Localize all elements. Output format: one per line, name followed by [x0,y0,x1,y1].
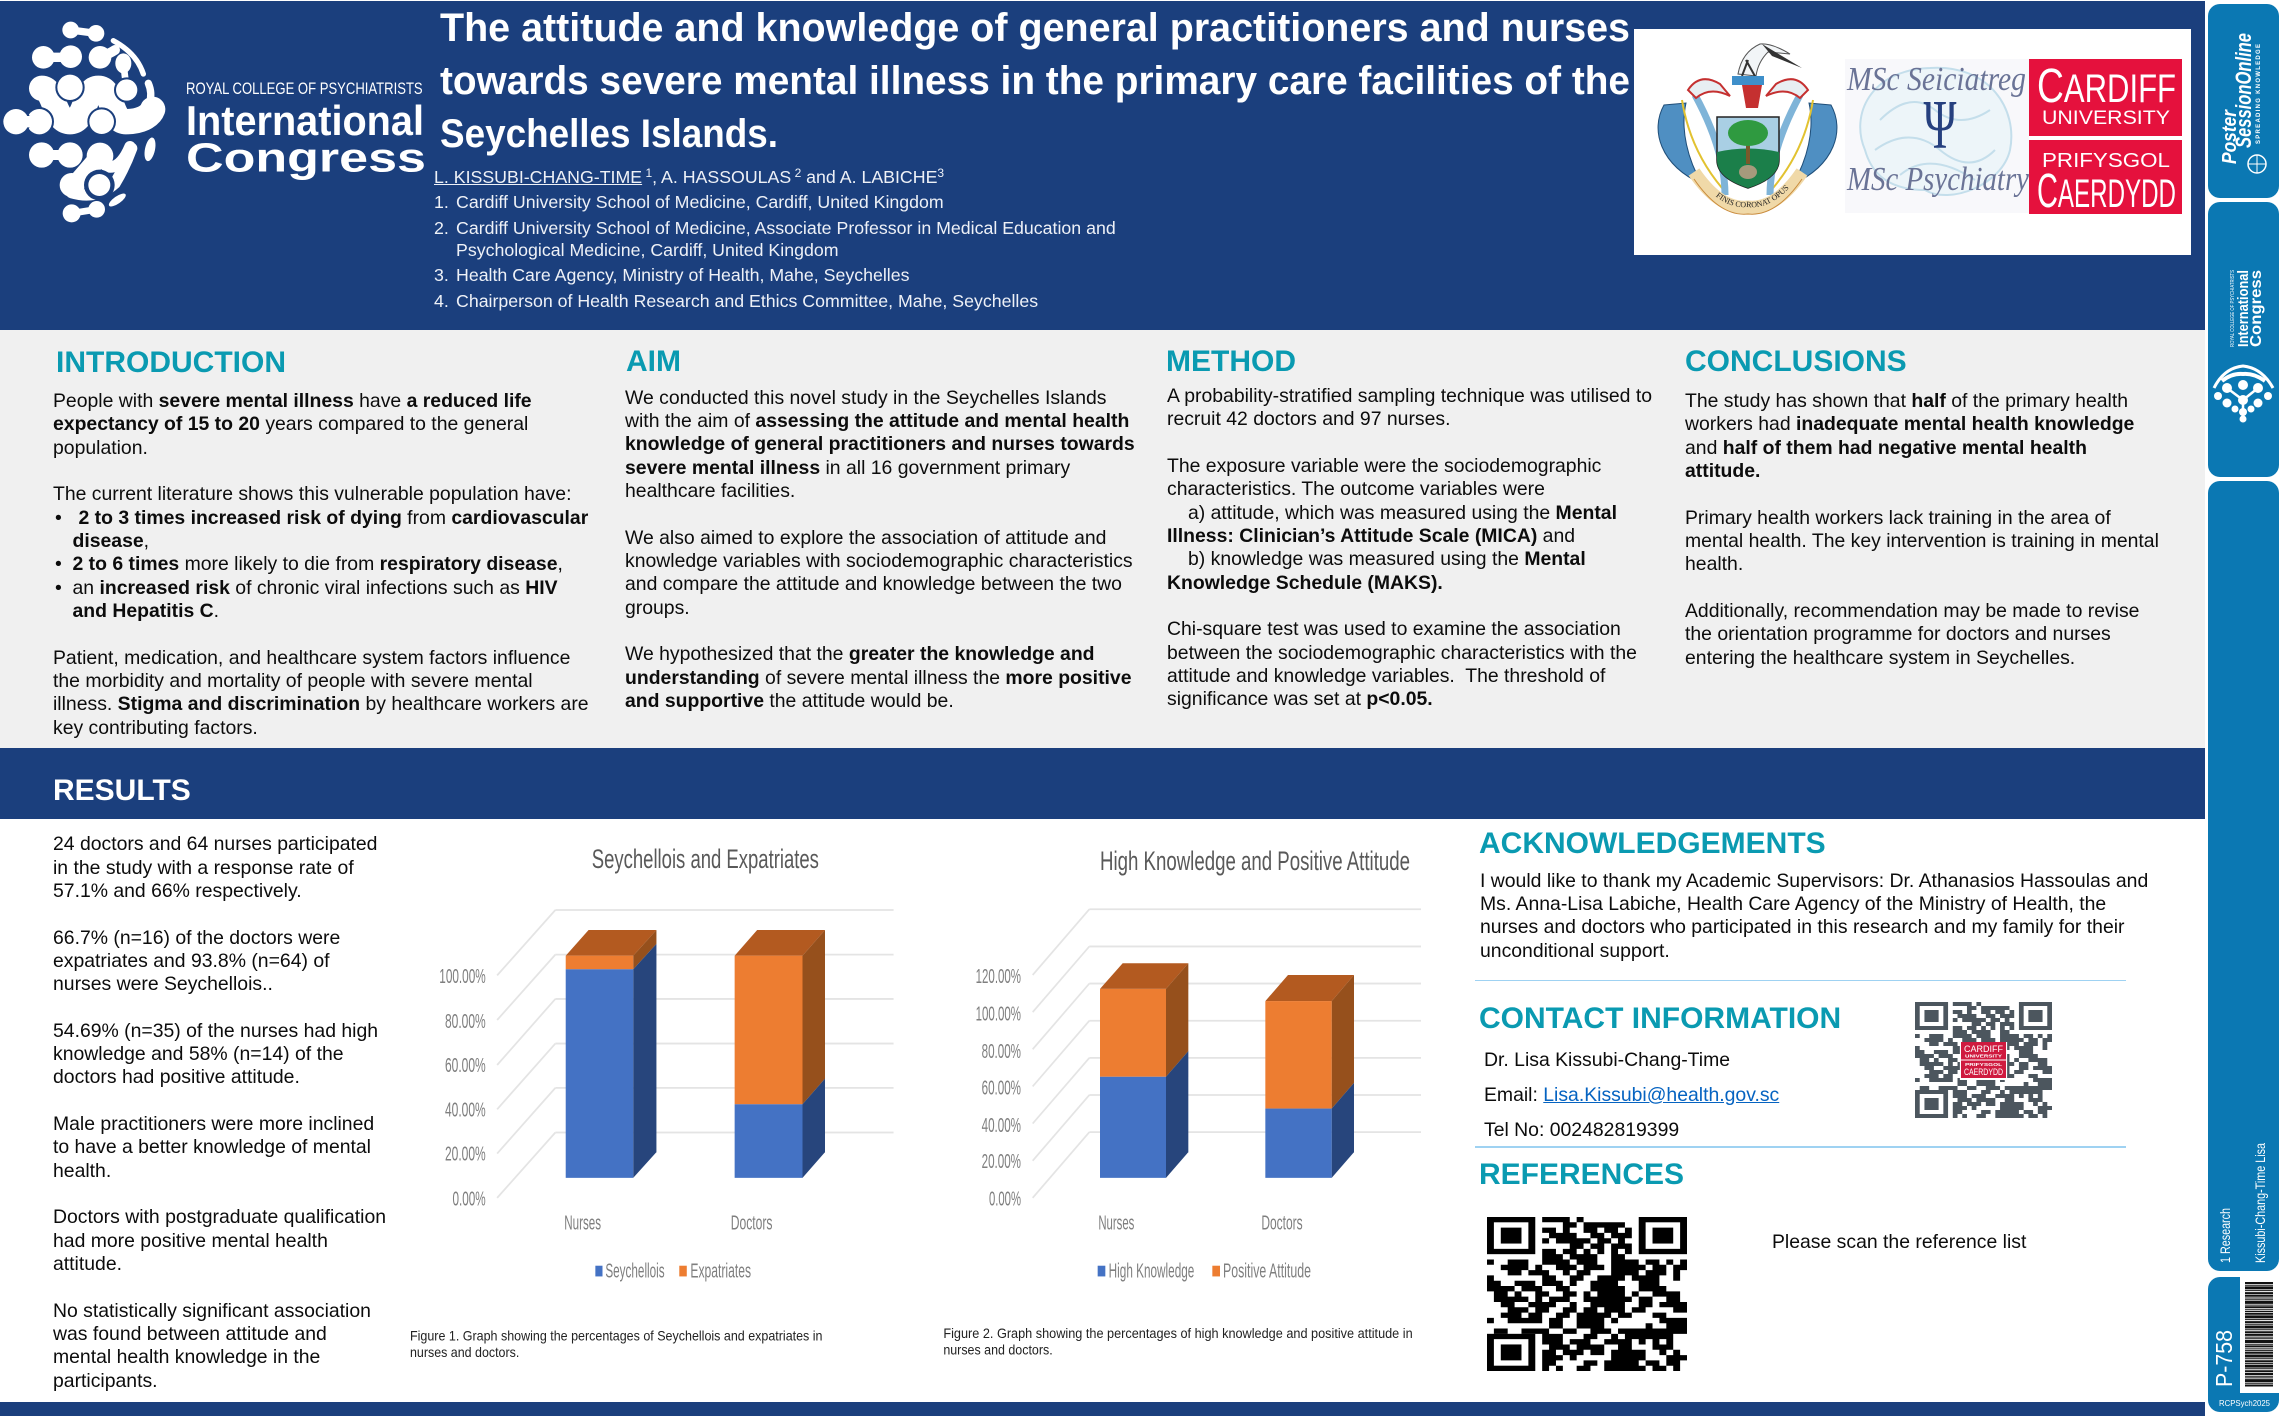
text: introduction: 2 to 3 times increased risk of dying from cardiovascular [78,507,588,529]
text: aim: understanding of severe mental illness the more positive [625,667,1131,689]
y axis labels: 60.00% [982,1077,1021,1100]
text: method: Chi-square test was used to examine the association [1167,618,1621,640]
y axis labels [439,966,486,1211]
icon: Cardiff logo in QR code: CARDIFF [1964,1044,2003,1054]
authors: L. KISSUBI-CHANG-TIME 1, A. HASSOULAS 2 and A. LABICHE3 [434,166,944,187]
text: method: Illness: Clinician’s Attitude Scale (MICA) and [1167,525,1575,547]
bar: nurses [566,930,656,1178]
icon: Seychelles coat of arms [1658,43,1838,215]
text: acknowledgements [1480,870,2148,962]
text: conclusions: attitude. [1685,460,1760,482]
text: results [53,833,386,1392]
text: results: nurses were Seychellois.. [53,973,273,995]
legend [595,1260,751,1282]
tab: poster number and barcode [2208,1277,2279,1412]
legend: Seychellois [605,1261,665,1283]
text: introduction: • [55,507,62,529]
text: aim: We conducted this novel study in the Seychelles Islands [625,387,1106,409]
icon: Cardiff University logo: UNIVERSITY [2042,108,2170,129]
y axis labels: 120.00% [976,966,1021,988]
text: results: 66.7% (n=16) of the doctors were [53,926,340,948]
affiliations list: Cardiff University School of Medicine, Cardiff, United Kingdom [456,192,944,212]
text: contact details: Tel No: 002482819399 [1484,1119,1679,1141]
text: results: to have a better knowledge of mental [53,1136,371,1158]
text: introduction: and Hepatitis C. [72,600,219,622]
text: introduction: key contributing factors. [53,717,258,739]
heading: introduction: INTRODUCTION [56,346,286,378]
legend: Positive Attitude [1223,1260,1311,1283]
text: conclusions: the orientation programme for doctors and nurses [1685,623,2111,645]
tab: International Congress: ROYAL COLLEGE OF PSYCHIATRISTS [2230,270,2236,347]
text: acknowledgements: unconditional support. [1480,940,1670,962]
text: results: attitude. [53,1253,122,1275]
figure 2 caption: Figure 2. Graph showing the percentages of high knowledge and positive attitude in [943,1325,1413,1341]
y axis labels: 40.00% [445,1099,486,1121]
text: results: 54.69% (n=35) of the nurses had high [53,1020,378,1042]
heading: method: METHOD [1166,345,1296,378]
figure 1 caption: Figure 1. Graph showing the percentages of Seychellois and expatriates in [410,1329,822,1344]
x axis labels: Nurses [564,1213,601,1235]
bar: doctors [735,930,825,1178]
logo text: Congress [186,135,426,181]
icon: Cardiff logo in QR code: PRIFYSGOL [1965,1062,2002,1067]
heading: acknowledgements: ACKNOWLEDGEMENTS [1479,826,1826,860]
abstract section background [0,330,2205,748]
affiliations list: 3. [434,265,449,285]
text: introduction: an increased risk of chronic viral infections such as HIV [72,577,558,599]
text: method: The exposure variable were the sociodemographic [1167,455,1601,477]
bar: doctors [1265,975,1354,1178]
text: introduction: • [55,553,62,575]
side tabs [2208,4,2279,1412]
x axis labels: Nurses [1098,1212,1134,1234]
text: results: No statistically significant association [53,1300,371,1322]
logo text: International [186,98,424,144]
y axis labels: 0.00% [452,1189,486,1211]
tab: Poster Session Online: SPREADING KNOWLEDGE [2256,44,2262,144]
heading: references: REFERENCES [1479,1158,1684,1190]
text: conclusions: health. [1685,553,1743,575]
icon: MSc Psychiatry logo: Ψ [1924,86,1956,163]
chart title: Seychellois and Expatriates [592,844,819,874]
text: contact details: Dr. Lisa Kissubi-Chang-Time [1484,1049,1730,1071]
text: introduction: Patient, medication, and healthcare system factors influence [53,647,570,669]
affiliations list [434,192,1116,311]
text: method: significance was set at p<0.05. [1167,688,1433,710]
y axis labels: 0.00% [989,1188,1021,1211]
text: acknowledgements: I would like to thank my Academic Supervisors: Dr. Athanasios Hassoulas and [1480,870,2148,892]
tab: author details: 1 Research [2217,1208,2233,1263]
icon: Cardiff logo in QR code: UNIVERSITY [1965,1054,2002,1058]
icon: Seychelles coat of arms: FINIS CORONAT OPUS [1716,185,1788,208]
text: method: b) knowledge was measured using the Mental [1188,548,1586,570]
text: aim: and supportive the attitude would be. [625,690,954,712]
text: contact details: Email: Lisa.Kissubi@health.gov.sc [1484,1084,1779,1106]
chart: Seychellois and Expatriates [410,844,894,1360]
text: introduction: People with severe mental illness have a reduced life [53,390,532,412]
y axis labels: 100.00% [439,966,486,988]
text: aim [625,387,1135,712]
figure 1 caption: nurses and doctors. [410,1345,519,1360]
title [440,6,1630,156]
text: aim: We also aimed to explore the association of attitude and [625,527,1106,549]
text: method: attitude and knowledge variables. The threshold of [1167,665,1605,687]
text: introduction: The current literature shows this vulnerable population have: [53,483,571,505]
title: Seychelles Islands. [440,112,778,156]
text: conclusions: The study has shown that half of the primary health [1685,390,2128,412]
text: aim: knowledge variables with sociodemographic characteristics [625,550,1133,572]
figure 1 caption [410,1329,822,1360]
icon: MSc Psychiatry logo [1845,59,2030,213]
y axis labels: 80.00% [445,1011,486,1033]
text: introduction: population. [53,437,148,459]
text: contact details [1484,1049,1780,1141]
icon: references QR code [1487,1217,1687,1371]
y axis labels: 40.00% [982,1114,1021,1137]
text: aim: and compare the attitude and knowledge between the two [625,573,1122,595]
y axis labels: 80.00% [982,1040,1021,1063]
text: introduction: disease, [72,530,149,552]
text: aim: with the aim of assessing the attitude and mental health [625,410,1129,432]
tab: author details: Kissubi-Chang-Time Lisa [2252,1143,2268,1263]
text: method: a) attitude, which was measured using the Mental [1188,502,1617,524]
text: results: participants. [53,1370,158,1392]
heading: aim: AIM [626,345,681,378]
text: method: between the sociodemographic characteristics with the [1167,642,1637,664]
text: conclusions: Primary health workers lack training in the area of [1685,507,2111,529]
x axis labels [564,1213,772,1235]
icon: contact QR code [1915,1002,2052,1118]
tab: International Congress [2208,202,2279,477]
text: results: doctors had positive attitude. [53,1066,300,1088]
partner logos panel [1634,29,2191,255]
text: aim: groups. [625,597,690,619]
text: conclusions: mental health. The key intervention is training in mental [1685,530,2159,552]
text: introduction: the morbidity and mortality of people with severe mental [53,670,533,692]
text: method: recruit 42 doctors and 97 nurses. [1167,408,1450,430]
text: acknowledgements: Ms. Anna-Lisa Labiche, Health Care Agency of the Ministry of Health, the [1480,893,2106,915]
title: The attitude and knowledge of general practitioners and nurses [440,6,1630,50]
title: towards severe mental illness in the primary care facilities of the [440,59,1630,103]
text: results: had more positive mental health [53,1230,328,1252]
results band [0,748,2205,819]
chart: High Knowledge and Positive Attitude [943,847,1421,1358]
y axis labels: 20.00% [982,1151,1021,1173]
affiliations list: Psychological Medicine, Cardiff, United Kingdom [456,240,838,260]
figure 2 caption [943,1325,1413,1358]
footer band [0,1402,2205,1416]
tab: poster number and barcode: RCPSych2025 [2219,1398,2270,1408]
heading: conclusions: CONCLUSIONS [1685,345,1907,378]
figure 2 caption: nurses and doctors. [943,1342,1053,1358]
bar: nurses [1100,963,1188,1178]
text: conclusions: and half of them had negative mental health [1685,437,2087,459]
text: results: expatriates and 93.8% (n=64) of [53,950,330,972]
text: introduction: expectancy of 15 to 20 years compared to the general [53,413,528,435]
tab: International Congress: Congress [2248,270,2265,347]
text: method [1167,385,1652,710]
text: results: Doctors with postgraduate qualification [53,1206,386,1228]
text: aim: severe mental illness in all 16 government primary [625,457,1070,479]
y axis labels: 20.00% [445,1144,486,1166]
heading: results: RESULTS [53,774,191,807]
tab: Poster Session Online: Poster [2219,109,2241,164]
icon: Cardiff University logo [2029,59,2182,218]
x axis labels: Doctors [1261,1212,1303,1234]
icon: Cardiff University logo: PRIFYSGOL [2042,150,2170,172]
icon: MSc Psychiatry logo: MSc Psychiatry [1846,161,2030,198]
icon: MSc Psychiatry logo: MSc Seiciatreg [1846,61,2026,98]
tab: Poster Session Online [2208,4,2279,198]
text: aim: knowledge of general practitioners and nurses towards [625,433,1135,455]
text: conclusions: workers had inadequate mental health knowledge [1685,413,2134,435]
text: introduction [53,390,589,739]
text: conclusions: Additionally, recommendation may be made to revise [1685,600,2139,622]
text: results: in the study with a response rate of [53,857,354,879]
affiliations list: 2. [434,218,449,238]
header band [0,1,2205,330]
legend: High Knowledge [1109,1260,1194,1283]
legend: Expatriates [690,1261,751,1283]
text: method: Knowledge Schedule (MAKS). [1167,572,1443,594]
text: introduction: 2 to 6 times more likely to die from respiratory disease, [72,553,563,575]
text: results: was found between attitude and [53,1323,327,1345]
text: results: Male practitioners were more inclined [53,1113,374,1135]
text: aim: We hypothesized that the greater the knowledge and [625,643,1095,665]
tab: author details [2208,481,2279,1271]
text: reference note: Please scan the reference list [1772,1231,2026,1253]
y axis labels: 60.00% [445,1055,486,1077]
text: results: health. [53,1160,111,1182]
logo text [186,79,426,181]
text: results: 24 doctors and 64 nurses participated [53,833,377,855]
x axis labels: Doctors [731,1213,772,1235]
affiliations list: Cardiff University School of Medicine, Associate Professor in Medical Education and [456,218,1116,238]
text: method: A probability-stratified sampling technique was utilised to [1167,385,1652,407]
text: results: 57.1% and 66% respectively. [53,880,302,902]
x axis labels [1098,1212,1303,1234]
logo: Royal College of Psychiatrists International Congress [3,22,426,222]
legend [1098,1260,1311,1283]
affiliations list: 1. [434,192,449,212]
affiliations list: Health Care Agency, Ministry of Health, Mahe, Seychelles [456,265,910,285]
text: method: characteristics. The outcome variables were [1167,478,1545,500]
heading: contact information: CONTACT INFORMATION [1479,1002,1841,1034]
text: results: mental health knowledge in the [53,1346,320,1368]
affiliations list: 4. [434,291,449,311]
text: conclusions: entering the healthcare system in Seychelles. [1685,647,2075,669]
text: introduction: illness. Stigma and discrimination by healthcare workers are [53,693,589,715]
text: acknowledgements: nurses and doctors who participated in this research and my family for their [1480,916,2125,938]
tab: International Congress: International [2235,270,2252,347]
icon: Cardiff logo in QR code [1961,1042,2006,1078]
tab: poster number and barcode: P-758 [2211,1330,2237,1387]
text: conclusions [1685,390,2159,669]
affiliations list: Chairperson of Health Research and Ethics Committee, Mahe, Seychelles [456,291,1038,311]
text: results: knowledge and 58% (n=14) of the [53,1043,344,1065]
y axis labels: 100.00% [976,1003,1021,1026]
text: introduction: • [55,577,62,599]
y axis labels [976,966,1021,1211]
text: aim: healthcare facilities. [625,480,795,502]
